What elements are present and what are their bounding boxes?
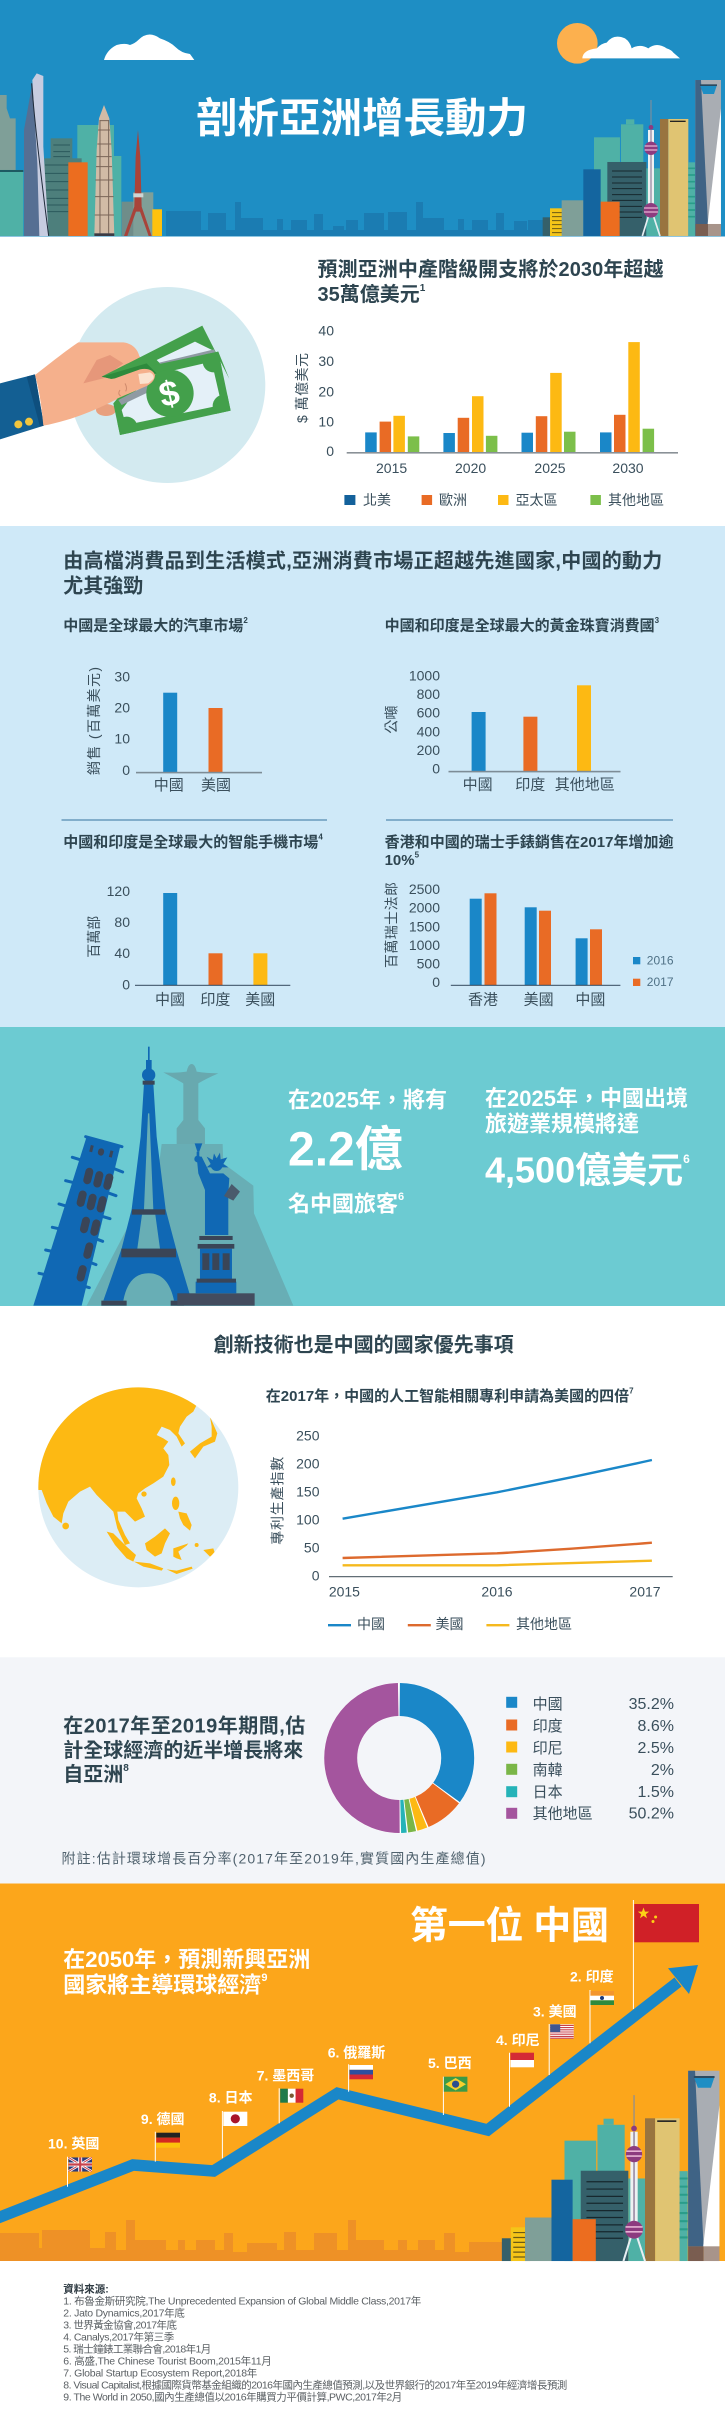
legend: growth share: 日本 — [533, 1784, 563, 1801]
heading: 2050 forecast: 在2050年，預測新興亞洲 — [63, 1947, 310, 1972]
y axis labels: 150 — [296, 1483, 320, 1499]
flag: Indonesia rank 4: 4. 印尼 — [496, 2032, 540, 2048]
legend: 北美 — [363, 492, 391, 508]
y axis labels: 250 — [296, 1427, 320, 1443]
flag: Russia rank 6 — [328, 2044, 385, 2092]
callout: number one China: 第一位 中國 — [410, 1906, 609, 1948]
legend: 2016 — [647, 954, 674, 968]
chart: AI patents — [266, 1386, 673, 1632]
title: 剖析亞洲增長動力 — [196, 94, 528, 142]
chart heading: 7 — [629, 1386, 634, 1395]
sources list: 1. 布魯金斯研究院,The Unprecedented Expansion of Global Middle Class,2017年 — [63, 2294, 421, 2307]
flag: Mexico rank 7: 7. 墨西哥 — [257, 2068, 314, 2084]
y axis labels — [296, 1427, 320, 1583]
y axis labels: 0 — [122, 762, 130, 778]
flag: Indonesia rank 4 — [496, 2032, 540, 2107]
legend — [328, 1616, 572, 1632]
y axis labels: 400 — [417, 723, 440, 739]
x axis labels — [468, 992, 605, 1008]
icon: right skyline — [502, 2071, 719, 2261]
bars: 2015 — [365, 416, 419, 452]
chart heading: 4 — [318, 832, 323, 841]
y axis labels: 40 — [114, 945, 130, 961]
flag: India rank 2 — [570, 1968, 614, 2043]
y axis labels: 0 — [432, 974, 440, 990]
x axis labels: 美國 — [524, 992, 554, 1008]
bars: 2025 — [522, 373, 576, 452]
bars — [163, 693, 222, 772]
sources list: 4. Canalys,2017年第三季 — [63, 2330, 175, 2343]
legend: growth share: 其他地區 — [533, 1806, 593, 1822]
chart heading: 10% — [385, 852, 415, 869]
heading: growth share: 計全球經濟的近半增長將來 — [63, 1738, 303, 1762]
chart heading: 在2017年，中國的人工智能相關專利申請為美國的四倍 — [266, 1388, 629, 1405]
flag: United States rank 3: 3. 美國 — [533, 2004, 577, 2020]
flag: India rank 2: 2. 印度 — [570, 1968, 614, 1984]
heading: 2050 forecast — [63, 1947, 310, 1998]
icon: world landmarks — [33, 1047, 293, 1306]
y axis labels: 0 — [432, 761, 440, 777]
icon: right skyline — [543, 80, 721, 236]
sources list — [63, 2294, 567, 2403]
x axis labels: 印度 — [200, 992, 230, 1008]
heading: middle class spending — [318, 257, 664, 306]
y axis labels: 120 — [107, 883, 130, 899]
y axis labels: 30 — [318, 353, 334, 369]
y axis labels: 200 — [296, 1455, 320, 1471]
legend: 其他地區 — [516, 1616, 572, 1632]
y axis labels: 30 — [114, 669, 130, 685]
panel: global growth share — [0, 1657, 725, 1884]
bars — [472, 685, 591, 771]
heading: growth share: 自亞洲 — [63, 1764, 123, 1786]
line: United States — [343, 1543, 652, 1558]
heading: consumer markets — [63, 549, 662, 598]
x axis labels: 2020 — [455, 460, 486, 476]
stat: 220 million travellers: 2.2億 — [288, 1124, 403, 1176]
x axis labels: 2030 — [612, 460, 644, 476]
bars — [163, 893, 267, 985]
x axis labels: 中國 — [155, 992, 185, 1008]
x axis labels: 2016 — [481, 1584, 513, 1600]
y axis title: 銷售 (百萬美元) — [86, 667, 102, 775]
legend: growth share: 中國 — [533, 1696, 563, 1713]
flag: United Kingdom rank 10: 10. 英國 — [48, 2135, 99, 2151]
chart: smartphone market — [63, 832, 323, 1008]
heading: innovation: 創新技術也是中國的國家優先事項 — [214, 1333, 514, 1357]
y axis labels — [114, 669, 130, 778]
heading: consumer markets: 尤其強勁 — [63, 575, 143, 598]
legend: growth share: 2% — [651, 1762, 674, 1779]
flag: United Kingdom rank 10 — [48, 2135, 99, 2187]
flag: Russia rank 6: 6. 俄羅斯 — [328, 2044, 385, 2060]
donut chart — [341, 1700, 458, 1816]
y axis labels: 2500 — [409, 881, 440, 897]
heading: consumer markets: 由高檔消費品到生活模式,亞洲消費市場正超越先進國家,中國的動力 — [63, 549, 662, 573]
icon: hand holding money: $ — [155, 373, 183, 415]
legend: 歐洲 — [439, 492, 467, 508]
y axis title: 百萬瑞士法郎 — [384, 882, 400, 968]
sources heading: 資料來源: — [63, 2282, 109, 2295]
flag: Brazil rank 5: 5. 巴西 — [428, 2055, 472, 2071]
legend: growth share: 8.6% — [638, 1718, 674, 1735]
bars: 2020 — [443, 396, 497, 452]
chart: gold jewellery — [384, 616, 660, 794]
y axis labels: 2000 — [409, 900, 440, 916]
stat: 220 million travellers: 名中國旅客 — [288, 1192, 398, 1216]
stat: 220 million travellers — [288, 1088, 447, 1216]
flag: Germany rank 9 — [141, 2111, 184, 2162]
flag: Japan rank 8 — [209, 2089, 252, 2158]
sources list: 8. Visual Capitalist,根據國際貨幣基金組織的2016年國內生產總值預測,以及世界銀行的2017年至2019年經濟增長預測 — [63, 2378, 567, 2391]
legend: growth share: 印尼 — [533, 1740, 563, 1757]
y axis labels: 1500 — [409, 918, 440, 934]
legend: growth share — [506, 1696, 674, 1822]
y axis labels: 50 — [304, 1539, 320, 1555]
icon: skyline silhouette — [166, 202, 543, 236]
x axis labels: 中國 — [463, 776, 493, 794]
x axis labels — [463, 776, 615, 794]
stat: tourism market size: 旅遊業規模將達 — [485, 1112, 639, 1136]
y axis labels: 20 — [114, 700, 130, 716]
legend: 中國 — [357, 1616, 385, 1632]
x axis labels: 美國 — [201, 777, 231, 794]
x axis labels: 香港 — [468, 992, 498, 1008]
legend: growth share: 印度 — [533, 1718, 563, 1735]
x axis labels: 2025 — [534, 460, 566, 476]
sources list: 2. Jato Dynamics,2017年底 — [63, 2306, 185, 2319]
legend: 其他地區 — [608, 492, 664, 508]
heading: 2050 forecast: 9 — [261, 1972, 267, 1984]
y axis title: 公噸 — [384, 706, 400, 734]
stat: 220 million travellers: 6 — [398, 1191, 404, 1203]
chart heading: 中國和印度是全球最大的智能手機市場 — [63, 834, 318, 851]
x axis labels — [154, 777, 231, 794]
icon: globe of Asia — [30, 1380, 238, 1587]
icon: skyline silhouette — [0, 2220, 502, 2261]
sources list: 5. 瑞士鐘錶工業聯合會,2018年1月 — [63, 2342, 211, 2355]
flag: Japan rank 8: 8. 日本 — [209, 2089, 252, 2105]
icon: left cloud — [104, 35, 194, 60]
heading: growth share: 在2017年至2019年期間,估 — [63, 1715, 305, 1738]
heading: middle class spending: 預測亞洲中產階級開支將於2030年超越 — [318, 257, 664, 281]
y axis labels: 10 — [318, 414, 334, 430]
x axis labels — [329, 1584, 661, 1600]
stat: tourism market size: 6 — [683, 1152, 690, 1166]
legend: 2017 — [647, 975, 674, 989]
y axis labels: 800 — [417, 686, 440, 702]
x axis labels: 其他地區 — [555, 776, 615, 794]
y axis labels: 80 — [114, 914, 130, 930]
legend: growth share: 2.5% — [638, 1740, 674, 1757]
footnote: growth share: 附註:估計環球增長百分率(2017年至2019年,實質國內生產總值) — [62, 1850, 486, 1866]
sources list: 3. 世界黃金協會,2017年底 — [63, 2318, 177, 2331]
icon: left skyline — [0, 73, 162, 236]
flag: United States rank 3 — [533, 2004, 577, 2075]
y axis labels: 1000 — [409, 667, 440, 683]
stat: tourism market size: 4,500億美元 — [485, 1150, 683, 1190]
y axis labels: 10 — [114, 731, 130, 747]
y axis labels: 600 — [417, 705, 440, 721]
y axis title: $ 萬億美元 — [294, 353, 310, 423]
legend: growth share: 南韓 — [533, 1762, 563, 1779]
panel: header banner — [0, 0, 725, 236]
panel: sources — [63, 2282, 567, 2403]
x axis labels: 美國 — [245, 992, 275, 1008]
y axis labels — [409, 667, 440, 777]
y axis title: 百萬部 — [86, 916, 102, 958]
heading: 2050 forecast: 國家將主導環球經濟 — [63, 1972, 261, 1998]
heading: growth share — [63, 1715, 305, 1786]
x axis labels: 2015 — [376, 460, 407, 476]
chart heading: 中國和印度是全球最大的黃金珠寶消費國 — [385, 618, 655, 634]
y axis labels: 40 — [318, 323, 334, 339]
stat: 220 million travellers: 在2025年，將有 — [288, 1088, 447, 1112]
chart heading: 香港和中國的瑞士手錶銷售在2017年增加逾 — [385, 833, 674, 851]
legend: growth share: 1.5% — [638, 1784, 674, 1801]
stat: tourism market size: 在2025年，中國出境 — [485, 1086, 688, 1111]
bars: 2030 — [600, 342, 654, 452]
flag: Mexico rank 7 — [257, 2068, 314, 2123]
x axis labels: 2015 — [329, 1584, 360, 1600]
chart heading — [385, 833, 674, 869]
legend: 美國 — [436, 1616, 464, 1632]
x axis labels: 中國 — [575, 992, 605, 1008]
legend — [633, 954, 674, 989]
flag: Brazil rank 5 — [428, 2055, 472, 2115]
y axis labels: 1000 — [409, 937, 440, 953]
sources list: 6. 高盛,The Chinese Tourist Boom,2015年11月 — [63, 2354, 272, 2367]
heading: growth share: 8 — [123, 1763, 129, 1774]
flag: Germany rank 9: 9. 德國 — [141, 2111, 184, 2127]
bars — [470, 893, 602, 985]
y axis labels — [107, 883, 130, 993]
legend: growth share: 35.2% — [629, 1696, 674, 1713]
chart heading: 3 — [655, 616, 660, 624]
y axis labels: 500 — [417, 955, 440, 971]
y axis labels: 20 — [318, 384, 334, 400]
chart heading: 5 — [415, 850, 420, 859]
x axis labels: 中國 — [154, 777, 184, 794]
y axis labels — [409, 881, 440, 990]
panel: consumer markets — [0, 526, 725, 1027]
line: rest of world — [343, 1561, 652, 1565]
chart: car market — [63, 616, 262, 794]
arrow: growth line — [0, 1965, 698, 2219]
panel: middle class spending — [0, 257, 678, 508]
legend: growth share: 50.2% — [629, 1806, 674, 1822]
y axis labels: 200 — [417, 742, 440, 758]
icon: hand holding money — [0, 287, 265, 483]
flag: China rank 1 — [633, 1900, 699, 2009]
panel: 2050 economy ranking — [0, 1884, 725, 2261]
x axis labels — [155, 992, 275, 1008]
x axis labels: 2017 — [629, 1584, 661, 1600]
chart heading: 2 — [243, 616, 248, 624]
bar chart: spending by region — [294, 323, 678, 508]
sources list: 9. The World in 2050,國內生產總值以2016年購買力平價計算,PWC,2017年2月 — [63, 2390, 402, 2403]
y axis labels: 0 — [326, 443, 334, 459]
y axis labels: 100 — [296, 1511, 320, 1527]
x axis labels — [376, 460, 644, 476]
chart: swiss watches — [384, 833, 674, 1008]
icon: sun and cloud — [557, 23, 680, 64]
legend — [344, 492, 664, 508]
chart heading: 中國是全球最大的汽車市場 — [63, 618, 243, 634]
stat: tourism market size — [485, 1086, 690, 1190]
y axis labels: 0 — [312, 1567, 320, 1583]
panel: innovation — [30, 1333, 673, 1632]
panel: outbound tourism — [0, 1027, 725, 1306]
legend: 亞太區 — [516, 492, 558, 508]
sources list: 7. Global Startup Ecosystem Report,2018年 — [63, 2366, 257, 2379]
y axis labels: 0 — [122, 977, 130, 993]
y axis labels — [318, 323, 334, 459]
x axis labels: 印度 — [515, 776, 545, 794]
heading: middle class spending: 1 — [420, 282, 426, 294]
line: China — [343, 1460, 652, 1519]
heading: middle class spending: 35萬億美元 — [318, 284, 420, 306]
y axis title: 專利生產指數 — [269, 1457, 285, 1545]
